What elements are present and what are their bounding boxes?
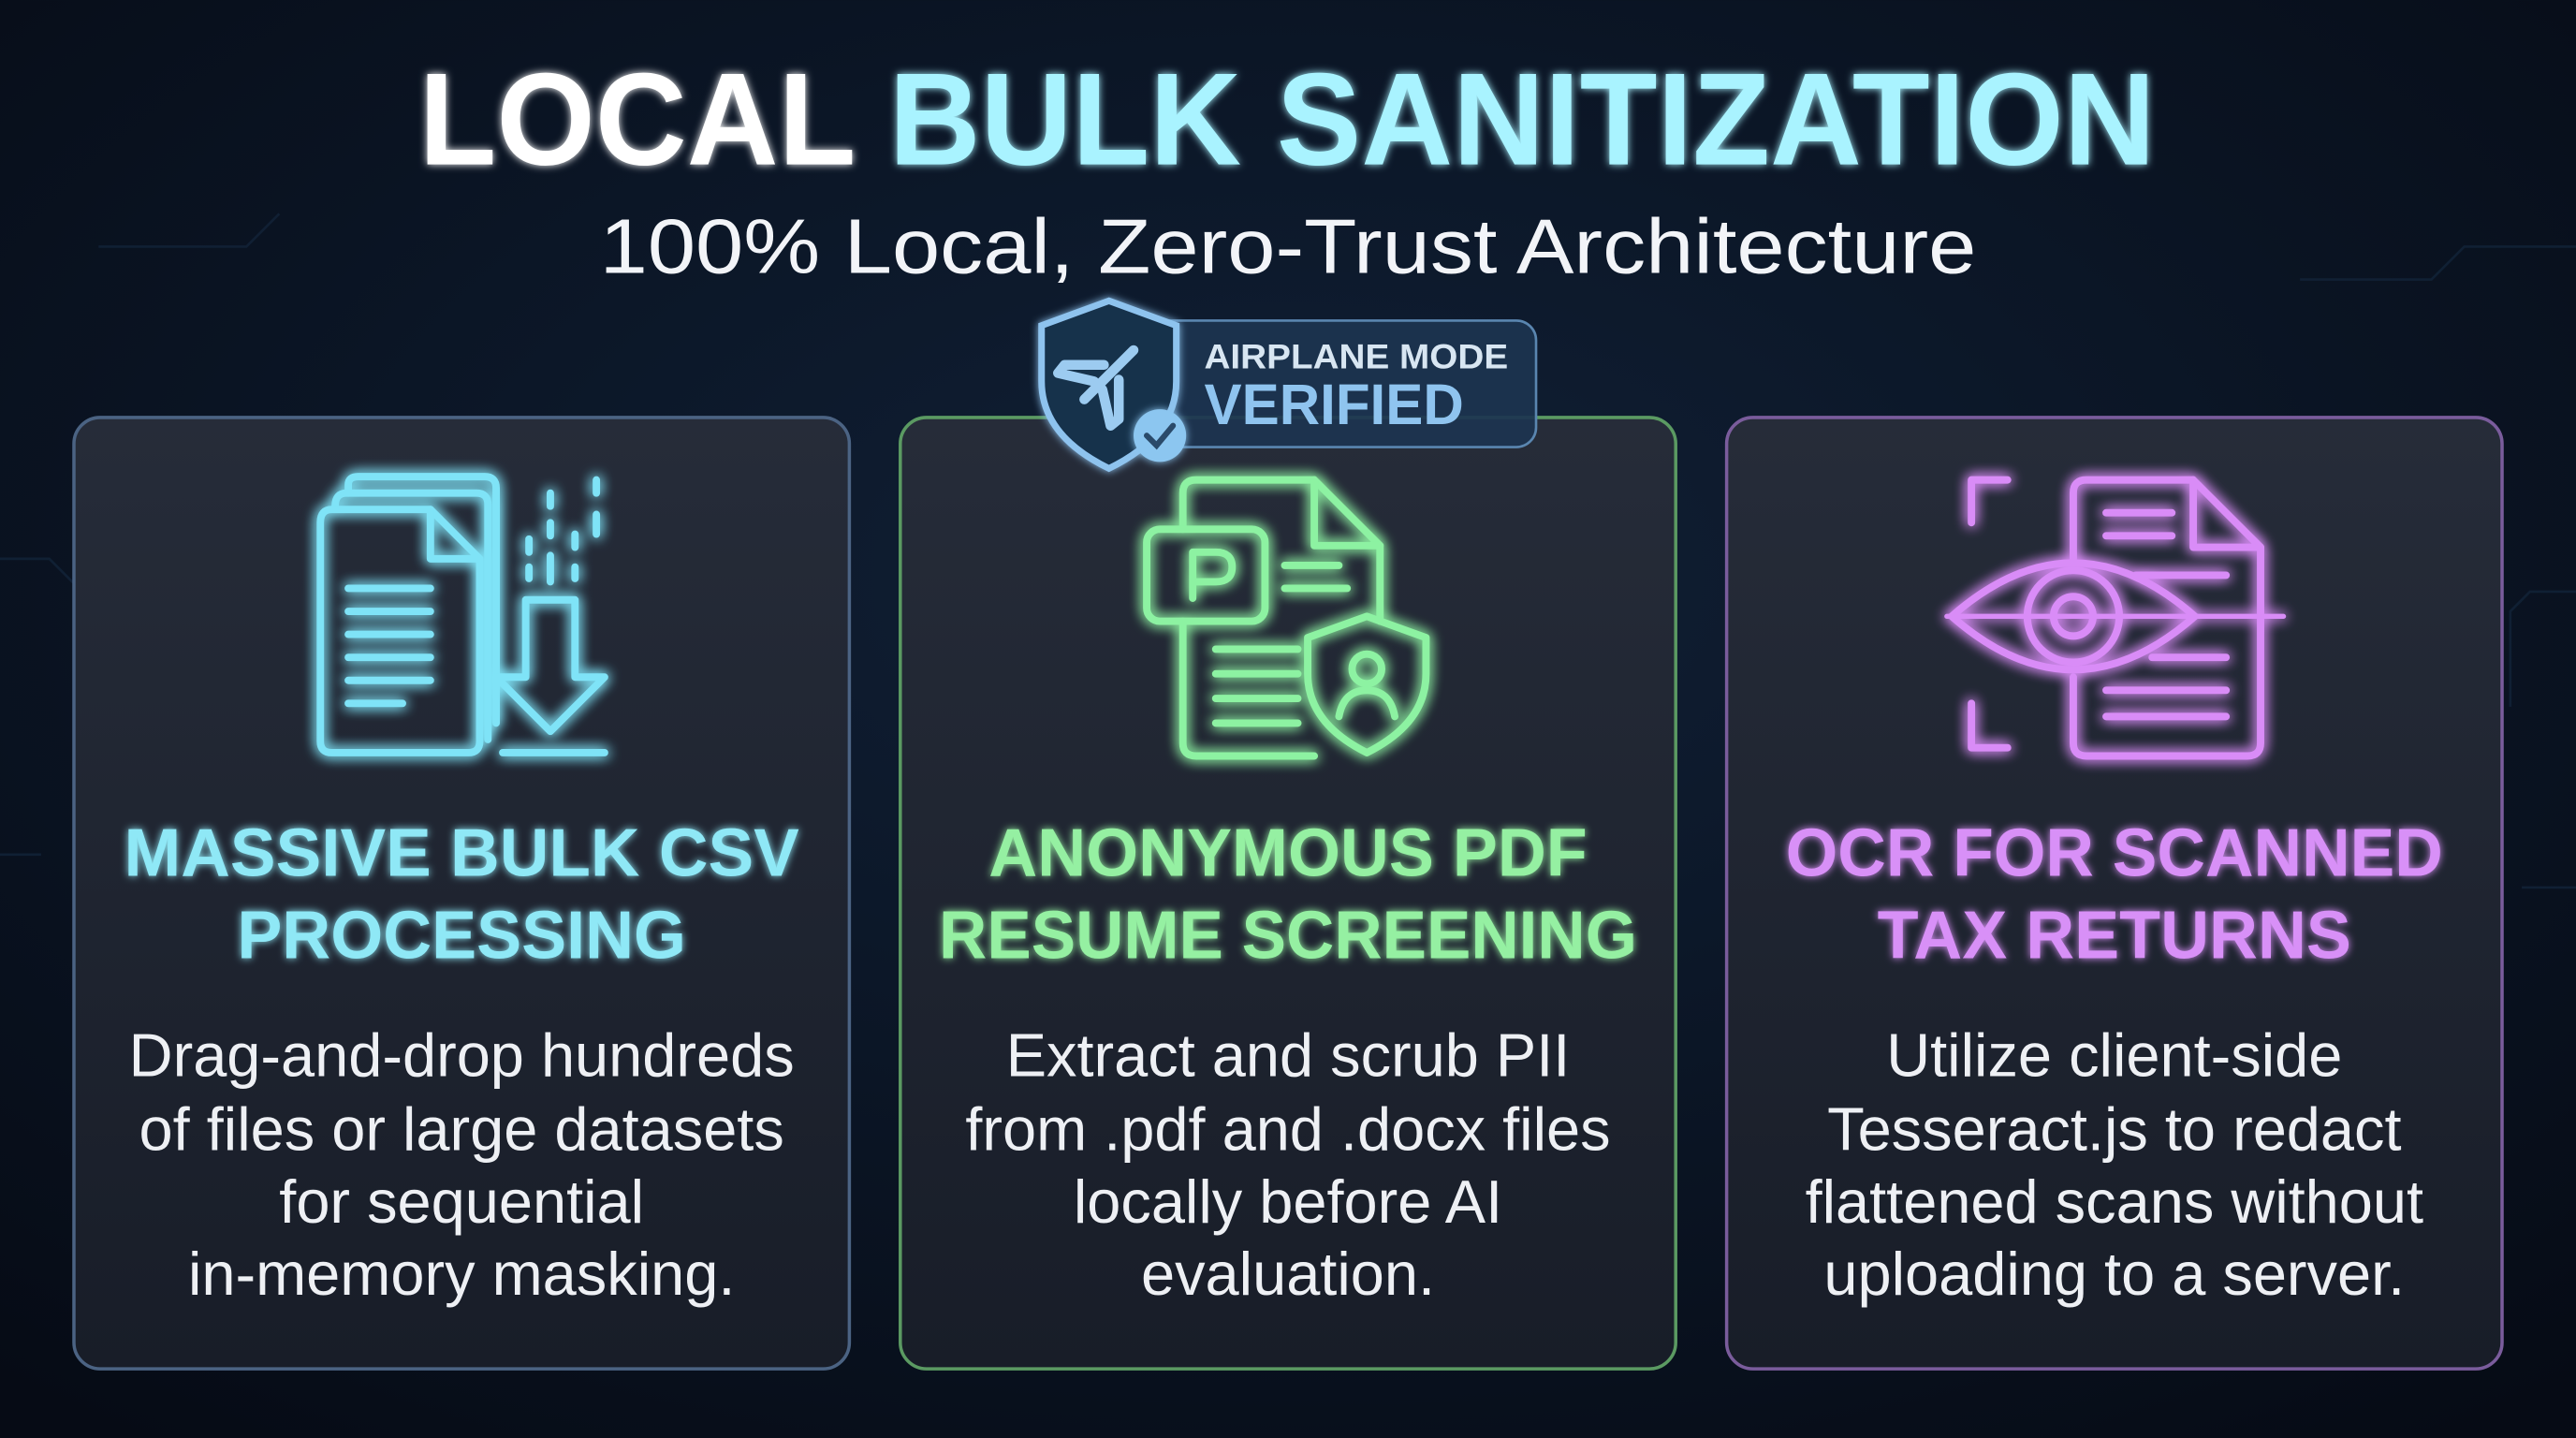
body text: Tesseract.js to redact bbox=[1827, 1095, 2402, 1164]
heading: ANONYMOUS PDF bbox=[988, 816, 1588, 891]
icon: shield airplane bbox=[1042, 301, 1186, 468]
heading: MASSIVE BULK CSV bbox=[124, 816, 799, 891]
body text: Utilize client-side bbox=[1886, 1021, 2342, 1090]
icon: pdf shield bbox=[1147, 480, 1426, 756]
panel: pdf resume bbox=[900, 418, 1676, 1369]
body text: locally before AI bbox=[1074, 1167, 1502, 1236]
panel: bulk csv bbox=[74, 418, 849, 1369]
badge text: AIRPLANE MODE bbox=[1204, 337, 1508, 375]
body text: evaluation. bbox=[1141, 1240, 1435, 1308]
body text: Drag-and-drop hundreds bbox=[129, 1021, 795, 1090]
body text: uploading to a server. bbox=[1823, 1240, 2405, 1308]
icon: files download bbox=[320, 477, 605, 753]
body text: from .pdf and .docx files bbox=[965, 1095, 1611, 1164]
heading: OCR FOR SCANNED bbox=[1786, 816, 2443, 891]
body text: in-memory masking. bbox=[188, 1240, 735, 1308]
body text: Extract and scrub PII bbox=[1006, 1021, 1570, 1090]
body text: for sequential bbox=[279, 1167, 644, 1236]
badge: airplane mode verified bbox=[1042, 301, 1536, 468]
body text: of files or large datasets bbox=[139, 1095, 784, 1164]
panel: ocr tax returns bbox=[1727, 418, 2502, 1369]
subtitle: 100% Local, Zero-Trust Architecture bbox=[600, 203, 1976, 289]
body text: flattened scans without bbox=[1806, 1167, 2423, 1236]
title: LOCAL BULK SANITIZATION bbox=[419, 46, 2156, 193]
heading: RESUME SCREENING bbox=[939, 898, 1637, 973]
heading: TAX RETURNS bbox=[1878, 898, 2351, 973]
icon: eye scan document bbox=[1947, 480, 2284, 756]
heading: PROCESSING bbox=[237, 898, 686, 973]
badge: airplane mode verified: VERIFIED bbox=[1204, 373, 1464, 437]
